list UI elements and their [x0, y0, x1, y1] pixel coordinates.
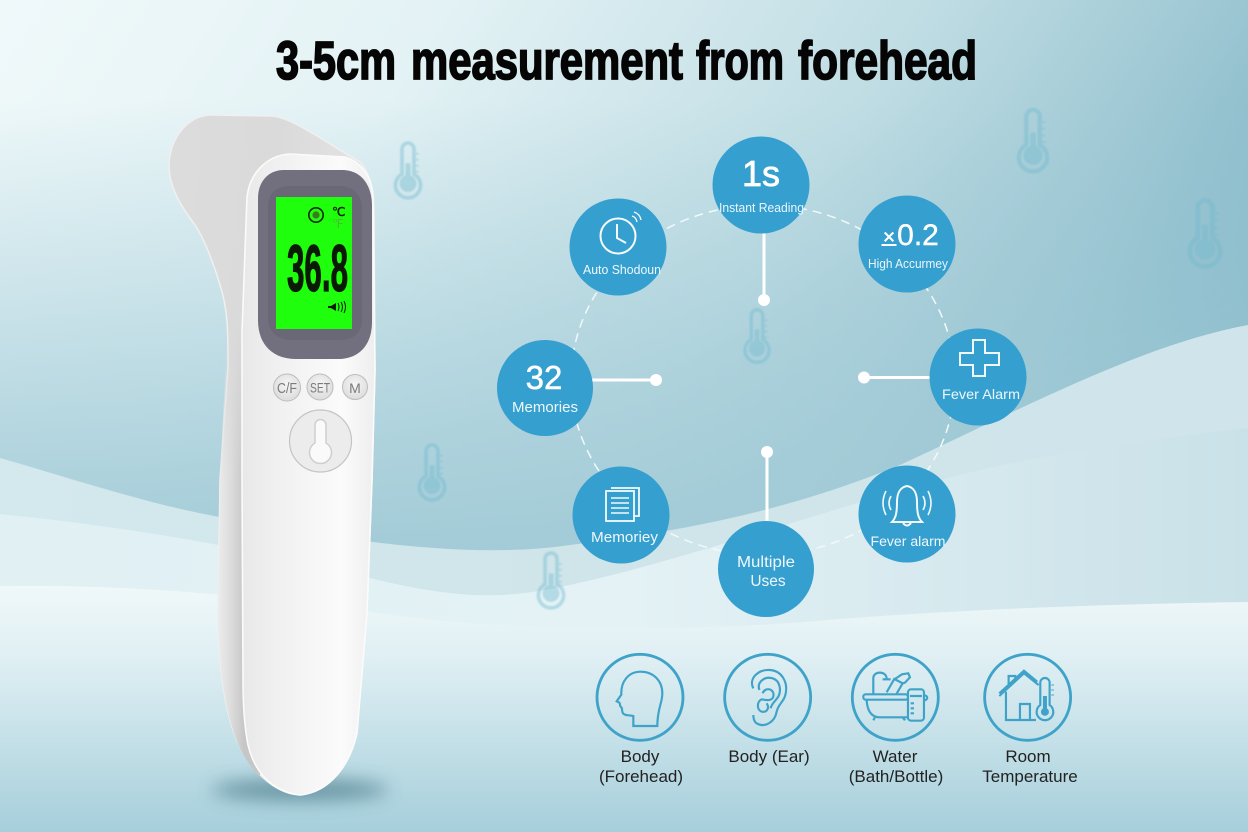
title: forehead	[798, 31, 977, 91]
spoke: multiple uses	[761, 446, 773, 522]
label: body ear: Body (Ear)	[728, 747, 810, 766]
use: water	[849, 654, 943, 786]
thermometer front face	[242, 154, 375, 795]
feature: memoriey	[572, 466, 670, 564]
feature: instant reading	[712, 136, 810, 234]
feature: multiple uses	[718, 521, 814, 617]
feature: multiple uses: Multiple	[737, 554, 795, 571]
feature: high accuracy: ×	[883, 226, 895, 249]
label: water: (Bath/Bottle)	[849, 767, 943, 786]
sound icon	[328, 301, 346, 313]
C/F button: C/F	[277, 381, 297, 397]
M button: M	[349, 380, 361, 396]
feature: 32 memories: Memories	[512, 400, 578, 416]
feature: fever alarm cross: Fever Alarm	[942, 386, 1020, 402]
thermometer lower side	[219, 359, 260, 777]
icon: bath and bottle	[852, 654, 938, 740]
label: body forehead: Body	[621, 747, 660, 766]
spoke: memories	[592, 374, 662, 386]
display bezel	[258, 170, 372, 359]
icon: ear	[725, 654, 811, 740]
feature: fever alarm bell	[858, 466, 956, 562]
feature: instant reading: 1s	[742, 153, 780, 194]
use: body ear	[725, 654, 811, 766]
SET button: SET	[310, 380, 330, 396]
use: body forehead	[597, 654, 683, 786]
smiley icon	[309, 208, 323, 222]
celsius unit: ℃	[332, 205, 345, 219]
feature: high accuracy: 0.2	[897, 219, 939, 252]
feature: high accuracy: High Accurmey	[868, 257, 949, 271]
title: from	[696, 31, 784, 91]
label: room temperature: Temperature	[982, 767, 1078, 786]
feature: fever alarm cross	[930, 328, 1026, 426]
LCD screen	[276, 197, 352, 329]
icon: house and thermometer	[985, 654, 1071, 740]
feature: 32 memories: 32	[526, 359, 562, 396]
feature: instant reading: Instant Reading	[719, 201, 804, 215]
label: body forehead: (Forehead)	[599, 767, 683, 786]
label: room temperature: Room	[1005, 747, 1051, 766]
thermometer back shell	[169, 115, 375, 795]
feature: fever alarm bell: Fever alarm	[870, 534, 946, 549]
use: room temperature	[982, 654, 1078, 786]
title: measurement	[411, 31, 683, 91]
feature: auto shutdown: Auto Shodoun	[583, 263, 661, 277]
feature: memoriey: Memoriey	[591, 530, 659, 546]
measure button	[290, 410, 352, 472]
icon: head	[597, 654, 683, 740]
product: forehead thermometer	[169, 115, 388, 801]
LCD screen: 36.8	[287, 231, 348, 305]
feature: high accuracy	[858, 196, 956, 292]
title: 3-5cm	[276, 31, 396, 91]
label: water: Water	[873, 747, 918, 766]
spoke: fever alarm	[858, 372, 930, 384]
title	[276, 31, 977, 91]
feature ring dashed arcs	[571, 205, 955, 555]
spoke: instant reading	[758, 232, 770, 306]
feature: auto shutdown	[570, 198, 666, 296]
feature: 32 memories	[497, 340, 593, 436]
faint thermometer icons	[395, 110, 1220, 608]
feature: multiple uses: Uses	[750, 573, 786, 590]
C/F button	[274, 374, 300, 401]
thermometer shadow	[212, 779, 388, 801]
fahrenheit unit: ℉	[332, 217, 343, 231]
M button	[342, 374, 368, 400]
SET button	[307, 374, 333, 400]
